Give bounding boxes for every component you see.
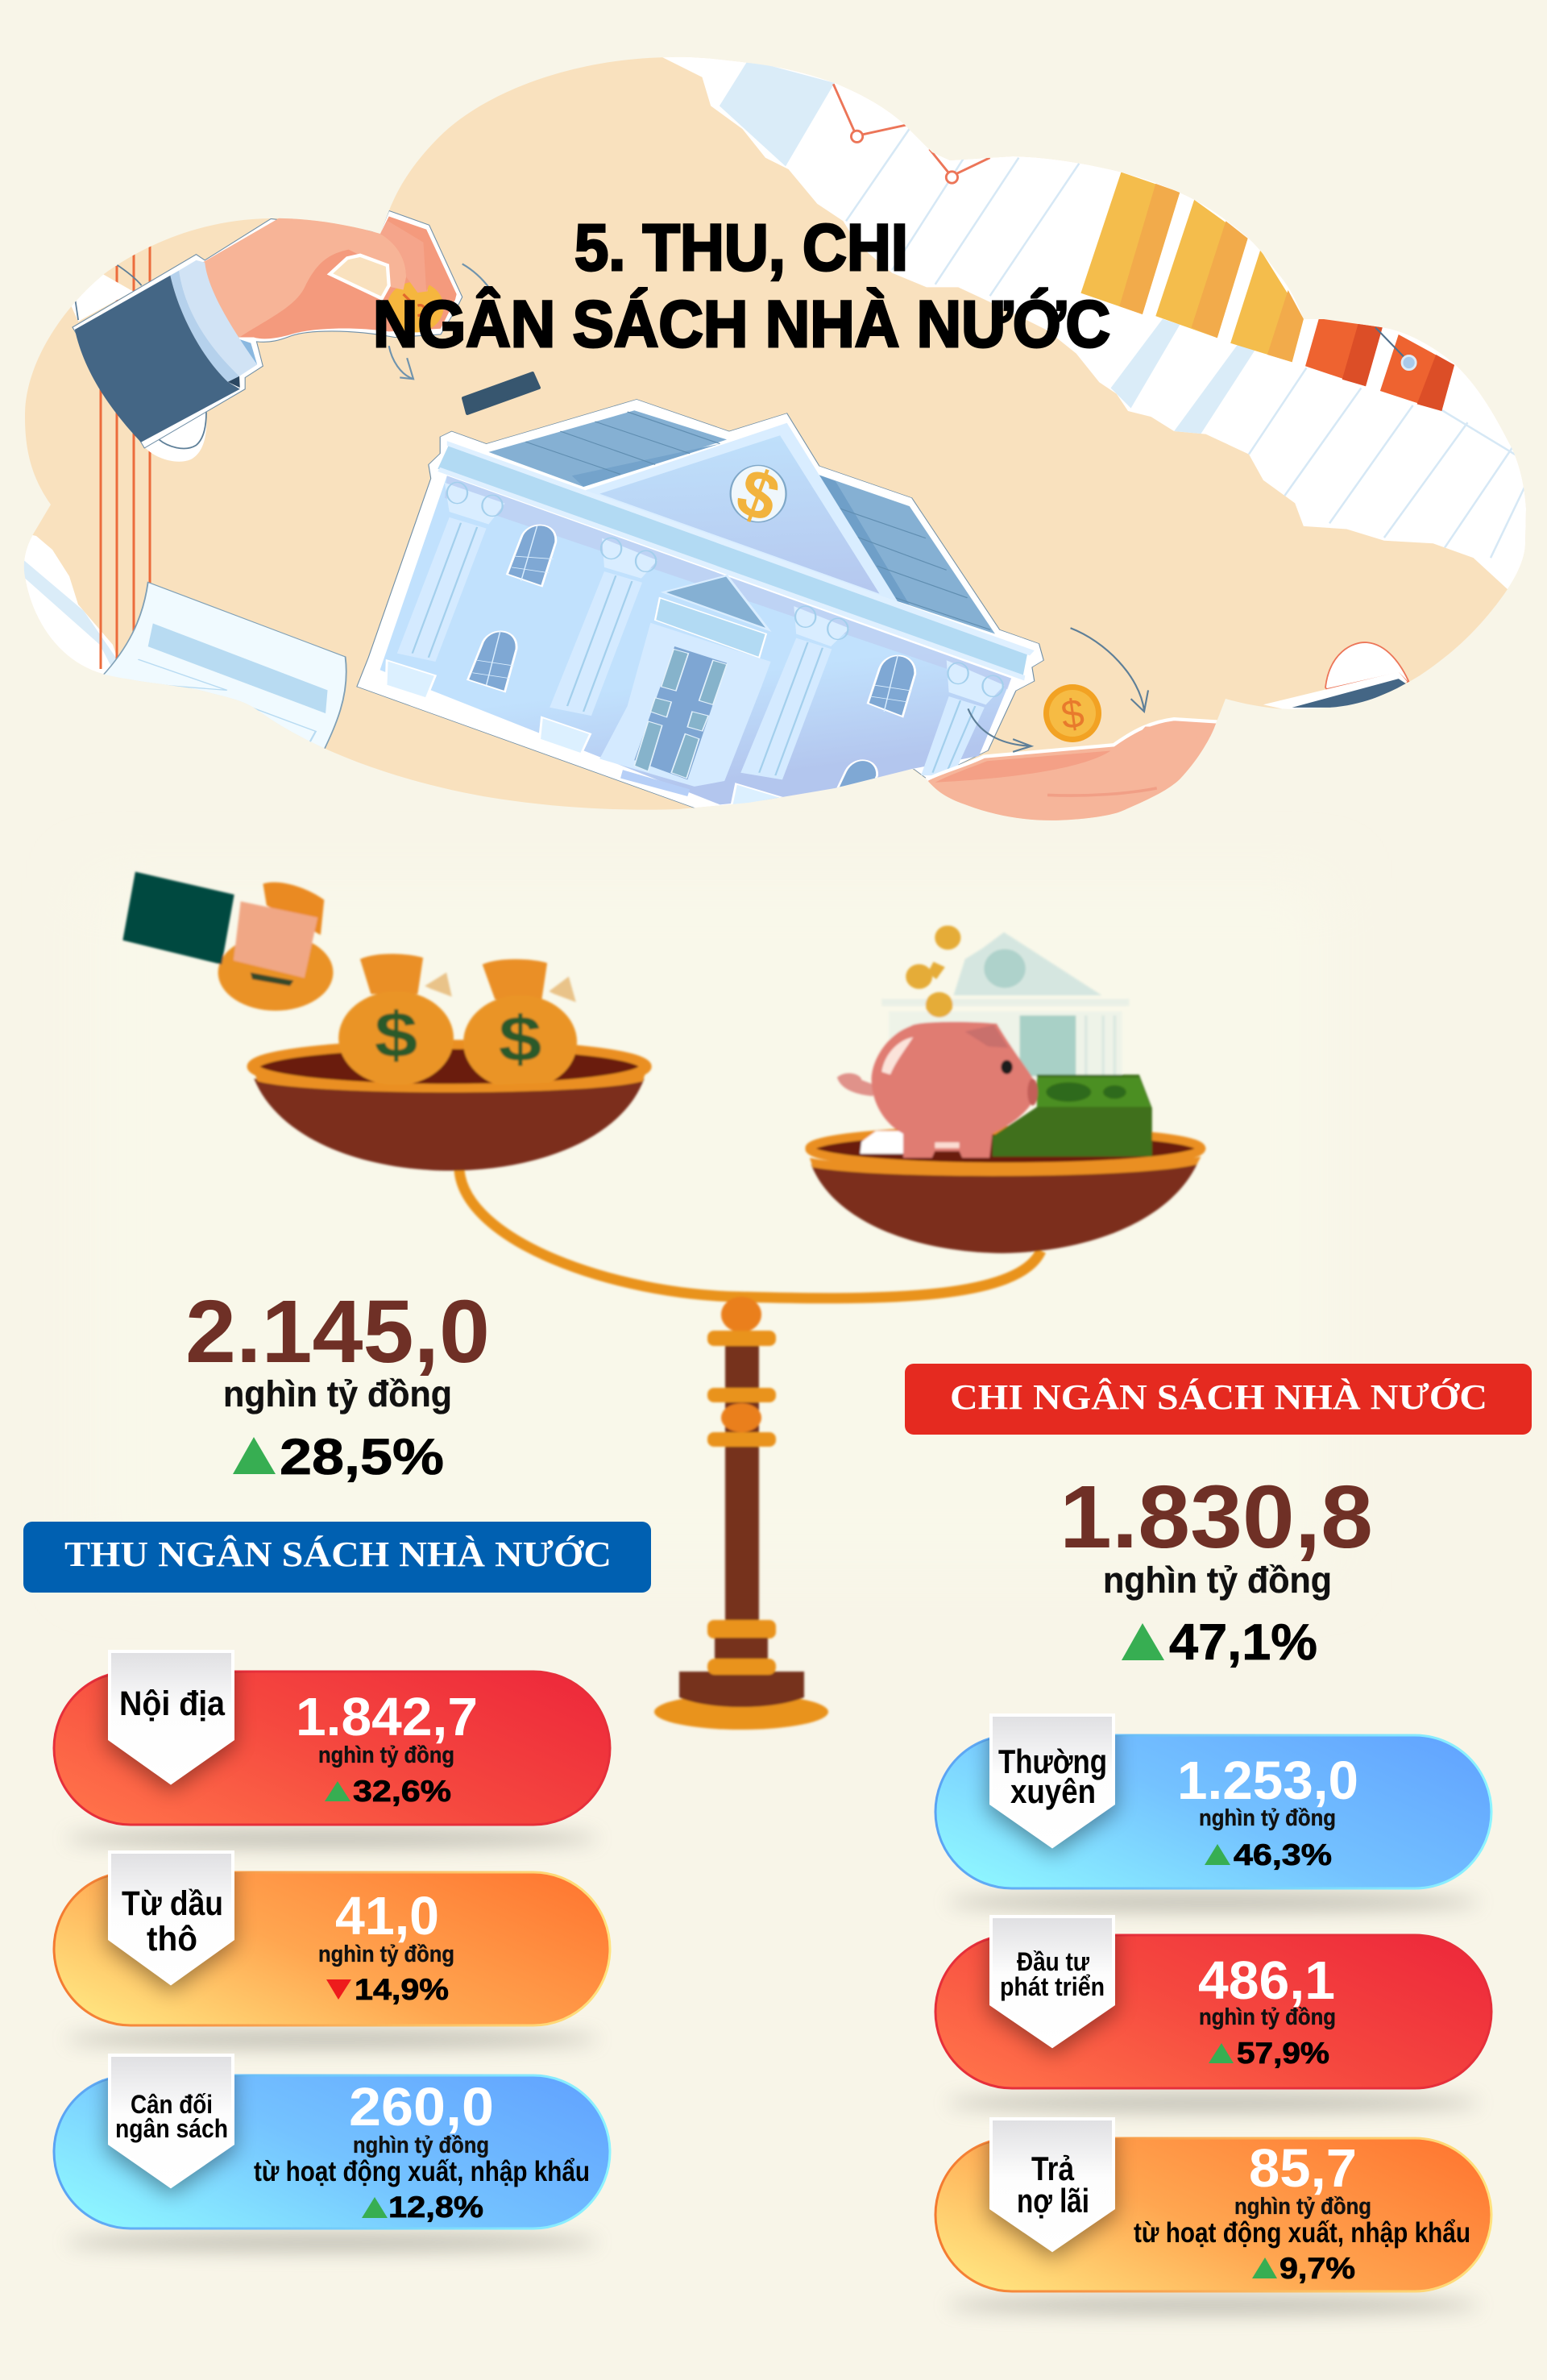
balance scale illustration bbox=[122, 872, 1201, 1730]
left hand dropping coin bbox=[71, 210, 490, 462]
card: Trả nợ lãi: 85,7 bbox=[1249, 2138, 1357, 2199]
card: Thường xuyên: xuyên bbox=[1010, 1772, 1096, 1810]
bag 1 bbox=[338, 954, 454, 1086]
bar chart: yellow and red bars bbox=[1080, 172, 1454, 411]
bottom right hand bbox=[925, 717, 1217, 820]
scale post bbox=[654, 1297, 828, 1730]
right headline figure bbox=[1060, 1468, 1373, 1671]
card: Trả nợ lãi: Trả bbox=[1031, 2149, 1075, 2187]
orange vertical lines bbox=[101, 242, 150, 669]
bag 2: $ bbox=[499, 1003, 541, 1075]
left bowl with money bags bbox=[122, 872, 646, 1171]
card: Thường xuyên: nghìn tỷ đồng bbox=[1199, 1805, 1336, 1831]
bottom right sleeve bbox=[1263, 642, 1410, 710]
dollar seal on pediment: $ bbox=[728, 453, 789, 537]
right bowl with piggy bank bbox=[810, 925, 1201, 1253]
card: Từ dầu thô bbox=[54, 1852, 610, 2048]
right headline figure: 47,1% bbox=[1169, 1614, 1317, 1671]
card: Từ dầu thô: nghìn tỷ đồng bbox=[318, 1942, 454, 1967]
left headline figure: 28,5% bbox=[280, 1429, 444, 1485]
card: Trả nợ lãi bbox=[935, 2119, 1491, 2314]
tag bbox=[991, 2119, 1114, 2250]
card: Đầu tư phát triển: nghìn tỷ đồng bbox=[1199, 2004, 1336, 2030]
bowl body bbox=[254, 1078, 645, 1171]
title: NGÂN SÁCH NHÀ NƯỚC bbox=[373, 288, 1110, 361]
card: Từ dầu thô: thô bbox=[147, 1920, 197, 1958]
card: Thường xuyên: Thường bbox=[998, 1742, 1107, 1780]
card: Đầu tư phát triển: Đầu tư bbox=[1017, 1947, 1090, 1976]
tag bbox=[110, 2055, 233, 2187]
bowl front rim bbox=[254, 1072, 646, 1092]
card: Trả nợ lãi: nợ lãi bbox=[1017, 2182, 1089, 2220]
up arrow bbox=[233, 1437, 276, 1474]
right headline figure: nghìn tỷ đồng bbox=[1103, 1560, 1332, 1601]
card: Đầu tư phát triển bbox=[935, 1917, 1491, 2112]
bank slot bbox=[463, 373, 539, 413]
heading: chi ngân sách bbox=[905, 1364, 1532, 1435]
bag 1: $ bbox=[375, 999, 417, 1071]
left paper strip bbox=[24, 535, 124, 679]
title bbox=[373, 211, 1110, 361]
scale arm bbox=[459, 1170, 1041, 1298]
header illustration: cloud with bank bbox=[0, 32, 1547, 854]
card: Nội địa: Nội địa bbox=[119, 1684, 226, 1723]
heading: thu ngân sách: THU NGÂN SÁCH NHÀ NƯỚC bbox=[64, 1535, 612, 1574]
card: Thường xuyên: 46,3% bbox=[1234, 1838, 1332, 1871]
right headline figure: 1.830,8 bbox=[1060, 1468, 1373, 1567]
card: Cân đối ngân sách bbox=[54, 2055, 610, 2251]
document bottom left bbox=[98, 582, 346, 757]
arrows near hand bbox=[968, 628, 1148, 752]
bowl front rim bbox=[810, 1157, 1201, 1176]
falling coins bbox=[906, 925, 960, 1017]
card: Nội địa: 32,6% bbox=[353, 1775, 451, 1808]
tag bbox=[110, 1852, 233, 1983]
card: Từ dầu thô: Từ dầu bbox=[122, 1884, 223, 1923]
tag bbox=[110, 1651, 233, 1783]
coin with dollar sign bbox=[1043, 684, 1101, 742]
bowl rim back bbox=[253, 1045, 645, 1089]
card: Từ dầu thô: 41,0 bbox=[335, 1886, 439, 1946]
heading: chi ngân sách: CHI NGÂN SÁCH NHÀ NƯỚC bbox=[950, 1377, 1487, 1417]
piggy bank bbox=[837, 1022, 1038, 1158]
card: Trả nợ lãi: nghìn tỷ đồng bbox=[1234, 2194, 1371, 2220]
card: Trả nợ lãi: từ hoạt động xuất, nhập khẩu bbox=[1134, 2217, 1470, 2249]
card: Nội địa: nghìn tỷ đồng bbox=[318, 1742, 454, 1768]
torn paper chart top right bbox=[662, 56, 1526, 589]
card: Thường xuyên: 1.253,0 bbox=[1177, 1751, 1358, 1811]
card: Từ dầu thô: 14,9% bbox=[355, 1973, 449, 2006]
card: Cân đối ngân sách: 12,8% bbox=[388, 2191, 483, 2224]
up arrow bbox=[1122, 1623, 1164, 1660]
left headline figure: 2.145,0 bbox=[185, 1282, 490, 1381]
card: Cân đối ngân sách: từ hoạt động xuất, nhập khẩu bbox=[254, 2156, 590, 2187]
card: Đầu tư phát triển: 57,9% bbox=[1237, 2037, 1329, 2070]
title: 5. THU, CHI bbox=[574, 211, 908, 285]
card: Cân đối ngân sách: 260,0 bbox=[349, 2077, 494, 2137]
bowl body bbox=[811, 1162, 1198, 1253]
left headline figure bbox=[185, 1282, 490, 1485]
card: Cân đối ngân sách: nghìn tỷ đồng bbox=[353, 2133, 489, 2158]
card: Đầu tư phát triển: 486,1 bbox=[1198, 1950, 1335, 2011]
card: Đầu tư phát triển: phát triển bbox=[1000, 1972, 1105, 2001]
bowl rim bbox=[810, 1130, 1201, 1167]
white paper under pig bbox=[860, 1131, 905, 1154]
coin with dollar sign: $ bbox=[1058, 690, 1087, 738]
card: Cân đối ngân sách: Cân đối bbox=[131, 2090, 213, 2119]
card: Thường xuyên bbox=[935, 1715, 1491, 1911]
card: Cân đối ngân sách: ngân sách bbox=[115, 2114, 228, 2143]
bank building bbox=[357, 399, 1043, 809]
heading: thu ngân sách bbox=[23, 1522, 651, 1593]
tag bbox=[991, 1715, 1114, 1846]
banknote stack bbox=[993, 1074, 1152, 1157]
tag bbox=[991, 1917, 1114, 2046]
bag 2 bbox=[463, 959, 577, 1090]
hand holding bag bbox=[122, 872, 333, 1011]
faded bank bbox=[881, 932, 1129, 1078]
card: Nội địa: 1.842,7 bbox=[296, 1687, 478, 1747]
card: Nội địa bbox=[54, 1651, 610, 1847]
card: Trả nợ lãi: 9,7% bbox=[1279, 2252, 1355, 2285]
left headline figure: nghìn tỷ đồng bbox=[223, 1373, 452, 1414]
